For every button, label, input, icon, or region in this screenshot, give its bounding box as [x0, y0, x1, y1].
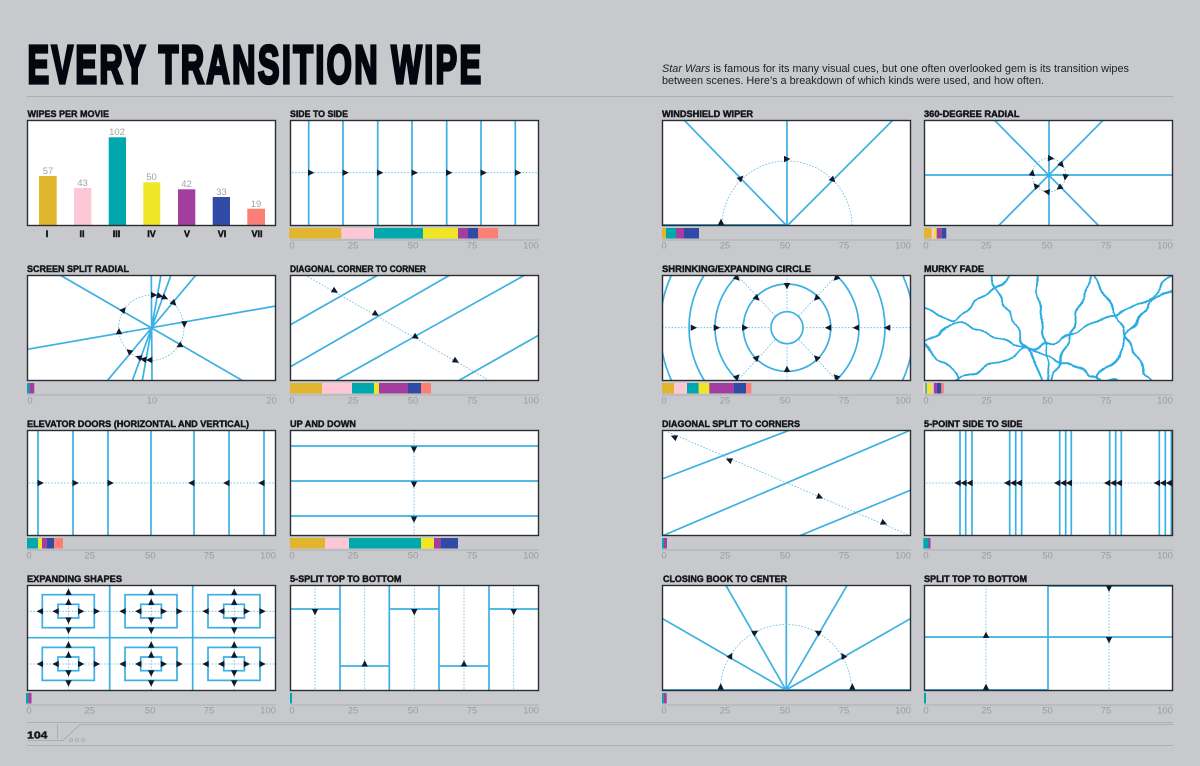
- axis: screen split radial: [27, 395, 277, 406]
- heading: screen split radial: SCREEN SPLIT RADIAL: [27, 263, 129, 274]
- panel: diagonal corner to corner: [289, 263, 539, 406]
- panel: diagonal split to corners: [661, 418, 911, 562]
- bar chart: II: [79, 229, 85, 239]
- axis: murky fade: 100: [1157, 396, 1173, 406]
- axis: shrinking/expanding circle: 100: [895, 396, 911, 406]
- axis: split top to bottom: 100: [1157, 706, 1173, 716]
- axis: murky fade: 75: [1101, 396, 1111, 406]
- axis: windshield wiper: 100: [895, 240, 911, 252]
- intro text: [662, 63, 1129, 87]
- axis: 360-degree radial: 25: [981, 240, 991, 252]
- bar chart: [39, 127, 265, 239]
- axis: elevator doors: 75: [204, 550, 214, 562]
- axis: windshield wiper: 0: [661, 240, 667, 252]
- wipe diagram: elevator doors: [29, 430, 274, 536]
- bar chart: 33: [216, 187, 227, 198]
- bar chart: VII: [251, 229, 263, 239]
- wipe diagram: split top to bottom: [924, 585, 1173, 691]
- wipe diagram: murky fade: [925, 276, 1172, 380]
- heading: murky fade: MURKY FADE: [924, 263, 984, 274]
- usage bar: diagonal corner to corner: [290, 383, 431, 394]
- axis: shrinking/expanding circle: 50: [780, 396, 790, 406]
- axis: 5-point side to side: 25: [981, 550, 992, 562]
- panel: screen split radial: [27, 263, 277, 406]
- wipe diagram: up and down: [290, 430, 539, 536]
- panel: split top to bottom: [923, 573, 1173, 716]
- wipe diagram: 5-point side to side: [926, 430, 1172, 536]
- axis: diagonal corner to corner: 50: [408, 396, 418, 406]
- axis: up and down: 25: [348, 550, 358, 562]
- axis: split top to bottom: [923, 705, 1173, 716]
- axis: up and down: 100: [523, 550, 539, 562]
- axis: closing book to center: 25: [720, 706, 730, 716]
- heading: 5-point side to side: 5-POINT SIDE TO SIDE: [924, 418, 1022, 429]
- axis: shrinking/expanding circle: 25: [720, 396, 730, 406]
- axis: side to side: [289, 240, 539, 252]
- axis: 360-degree radial: 0: [923, 240, 929, 252]
- bar chart: V: [184, 229, 190, 239]
- axis: split top to bottom: 25: [981, 706, 992, 716]
- usage bar: shrinking/expanding circle: [662, 383, 751, 394]
- axis: 5-point side to side: 0: [923, 550, 929, 562]
- axis: 5-split top to bottom: 50: [408, 706, 418, 716]
- usage bar: murky fade: [923, 383, 944, 394]
- panel: windshield wiper: [661, 108, 911, 252]
- heading: elevator doors: ELEVATOR DOORS (HORIZONTAL AND VERTICAL): [27, 418, 249, 429]
- intro text: Star Wars is famous for its many visual cues, but one often overlooked gem is its transition wipes: [662, 63, 1129, 75]
- axis: closing book to center: 100: [895, 706, 911, 716]
- axis: 5-split top to bottom: 25: [348, 706, 358, 716]
- title: EVERY TRANSITION WIPE: [28, 36, 481, 95]
- panel: closing book to center: [661, 573, 911, 716]
- axis: split top to bottom: 50: [1042, 706, 1053, 716]
- axis: 360-degree radial: 100: [1157, 240, 1173, 252]
- bar chart: 43: [77, 178, 88, 189]
- bar chart: 57: [43, 166, 53, 177]
- axis: diagonal split to corners: 75: [839, 550, 849, 562]
- bar chart: I: [46, 229, 48, 239]
- axis: split top to bottom: 0: [923, 706, 929, 716]
- panel: 5-point side to side: [923, 418, 1173, 562]
- axis: elevator doors: 0: [26, 550, 32, 562]
- axis: 5-split top to bottom: [289, 705, 539, 716]
- axis: shrinking/expanding circle: 75: [839, 396, 849, 406]
- axis: diagonal split to corners: [661, 550, 911, 562]
- heading: windshield wiper: WINDSHIELD WIPER: [662, 108, 753, 119]
- axis: 5-split top to bottom: 75: [467, 706, 477, 716]
- usage bar: split top to bottom: [924, 693, 926, 704]
- axis: diagonal split to corners: 50: [780, 550, 790, 562]
- usage bar: up and down: [290, 538, 458, 548]
- axis: windshield wiper: 75: [839, 240, 849, 252]
- heading: up and down: UP AND DOWN: [290, 418, 356, 429]
- axis: expanding shapes: 0: [26, 706, 32, 716]
- axis: diagonal split to corners: 0: [661, 550, 667, 562]
- axis: side to side: 0: [289, 240, 295, 252]
- axis: expanding shapes: 75: [204, 706, 214, 716]
- axis: screen split radial: 0: [27, 396, 33, 406]
- axis: elevator doors: [26, 550, 276, 562]
- heading: 5-split top to bottom: 5-SPLIT TOP TO BOTTOM: [290, 573, 402, 584]
- usage bar: side to side: [289, 228, 498, 238]
- bar chart: 102: [109, 127, 125, 138]
- page number: 104: [27, 730, 48, 742]
- axis: expanding shapes: 100: [260, 706, 276, 716]
- axis: up and down: [289, 550, 539, 562]
- wipe diagram: closing book to center: [662, 585, 911, 690]
- usage bar: windshield wiper: [662, 228, 699, 238]
- axis: closing book to center: [661, 705, 911, 716]
- axis: expanding shapes: 50: [145, 706, 156, 716]
- axis: windshield wiper: 25: [720, 240, 730, 252]
- axis: 5-point side to side: 100: [1157, 550, 1173, 562]
- heading: closing book to center: CLOSING BOOK TO CENTER: [663, 573, 787, 584]
- axis: diagonal corner to corner: [289, 395, 539, 406]
- axis: murky fade: 25: [981, 396, 992, 406]
- axis: elevator doors: 100: [260, 550, 276, 562]
- heading: shrinking/expanding circle: SHRINKING/EXPANDING CIRCLE: [662, 263, 811, 274]
- heading: side to side: SIDE TO SIDE: [290, 108, 348, 119]
- axis: diagonal corner to corner: 75: [467, 396, 477, 406]
- axis: elevator doors: 25: [84, 550, 95, 562]
- panel: 5-split top to bottom: [289, 573, 539, 716]
- axis: elevator doors: 50: [145, 550, 156, 562]
- heading: diagonal corner to corner: DIAGONAL CORNER TO CORNER: [290, 263, 426, 274]
- axis: murky fade: [923, 395, 1173, 406]
- axis: windshield wiper: 50: [780, 240, 790, 252]
- axis: screen split radial: 10: [147, 396, 157, 406]
- usage bar: 5-point side to side: [923, 538, 930, 548]
- axis: side to side: 100: [523, 240, 539, 252]
- axis: split top to bottom: 75: [1101, 706, 1111, 716]
- heading: 360-degree radial: 360-DEGREE RADIAL: [924, 108, 1020, 119]
- axis: diagonal corner to corner: 25: [348, 396, 358, 406]
- panel: up and down: [289, 418, 539, 562]
- axis: side to side: 25: [348, 240, 358, 252]
- axis: windshield wiper: [661, 240, 911, 252]
- axis: diagonal split to corners: 25: [720, 550, 730, 562]
- panel: shrinking/expanding circle: [662, 265, 912, 404]
- wipe diagram: diagonal split to corners: [662, 430, 911, 536]
- usage bar: 360-degree radial: [924, 228, 946, 238]
- axis: shrinking/expanding circle: 0: [661, 396, 667, 406]
- wipe diagram: diagonal corner to corner: [290, 275, 539, 381]
- wipe diagram: side to side: [292, 120, 539, 226]
- heading: split top to bottom: SPLIT TOP TO BOTTOM: [924, 573, 1027, 584]
- axis: 5-point side to side: [923, 550, 1173, 562]
- axis: up and down: 50: [408, 550, 418, 562]
- bar chart: VI: [218, 229, 226, 239]
- wipe diagram: 5-split top to bottom: [290, 585, 539, 691]
- axis: shrinking/expanding circle: [661, 395, 911, 406]
- axis: 5-point side to side: 75: [1101, 550, 1111, 562]
- axis: diagonal corner to corner: 0: [289, 396, 295, 406]
- bar chart: 50: [146, 172, 157, 183]
- axis: expanding shapes: 25: [84, 706, 95, 716]
- axis: closing book to center: 75: [839, 706, 849, 716]
- usage bar: closing book to center: [662, 693, 667, 704]
- axis: diagonal corner to corner: 100: [523, 396, 539, 406]
- panel: elevator doors: [26, 418, 276, 562]
- usage bar: expanding shapes: [26, 693, 32, 704]
- axis: up and down: 75: [467, 550, 477, 562]
- axis: 360-degree radial: 75: [1101, 240, 1111, 252]
- panel: murky fade: [920, 263, 1175, 406]
- axis: side to side: 50: [408, 240, 418, 252]
- axis: 5-split top to bottom: 100: [523, 706, 539, 716]
- footer: [27, 722, 1173, 746]
- axis: 360-degree radial: 50: [1042, 240, 1052, 252]
- bar chart: 19: [251, 199, 261, 210]
- panel: wipes per movie: [27, 108, 276, 239]
- axis: diagonal split to corners: 100: [895, 550, 911, 562]
- axis: closing book to center: 50: [780, 706, 790, 716]
- wipe diagram: windshield wiper: [662, 120, 893, 226]
- wipe diagram: screen split radial: [27, 275, 276, 381]
- panel: expanding shapes: [26, 573, 276, 716]
- axis: closing book to center: 0: [661, 706, 667, 716]
- intro text: between scenes. Here’s a breakdown of which kinds were used, and how often.: [662, 75, 1044, 87]
- usage bar: 5-split top to bottom: [290, 693, 292, 704]
- axis: side to side: 75: [467, 240, 477, 252]
- bar chart: 42: [181, 179, 192, 190]
- axis: murky fade: 50: [1042, 396, 1053, 406]
- axis: screen split radial: 20: [266, 396, 277, 406]
- axis: 5-split top to bottom: 0: [289, 706, 295, 716]
- axis: 5-point side to side: 50: [1042, 550, 1053, 562]
- axis: expanding shapes: [26, 705, 276, 716]
- usage bar: elevator doors: [27, 538, 63, 548]
- heading: wipes per movie: WIPES PER MOVIE: [28, 108, 109, 119]
- usage bar: diagonal split to corners: [662, 538, 667, 548]
- usage bar: screen split radial: [27, 383, 34, 394]
- axis: murky fade: 0: [923, 396, 929, 406]
- axis: 360-degree radial: [923, 240, 1173, 252]
- wipe diagram: expanding shapes: [27, 585, 276, 691]
- bar chart: III: [113, 229, 120, 239]
- panel: 360-degree radial: [923, 108, 1173, 252]
- wipe diagram: shrinking/expanding circle: [663, 276, 910, 380]
- panel: side to side: [289, 108, 539, 252]
- heading: diagonal split to corners: DIAGONAL SPLIT TO CORNERS: [662, 418, 800, 429]
- wipe diagram: 360-degree radial: [924, 120, 1173, 226]
- axis: up and down: 0: [289, 550, 295, 562]
- bar chart: IV: [147, 229, 156, 239]
- heading: expanding shapes: EXPANDING SHAPES: [27, 573, 122, 584]
